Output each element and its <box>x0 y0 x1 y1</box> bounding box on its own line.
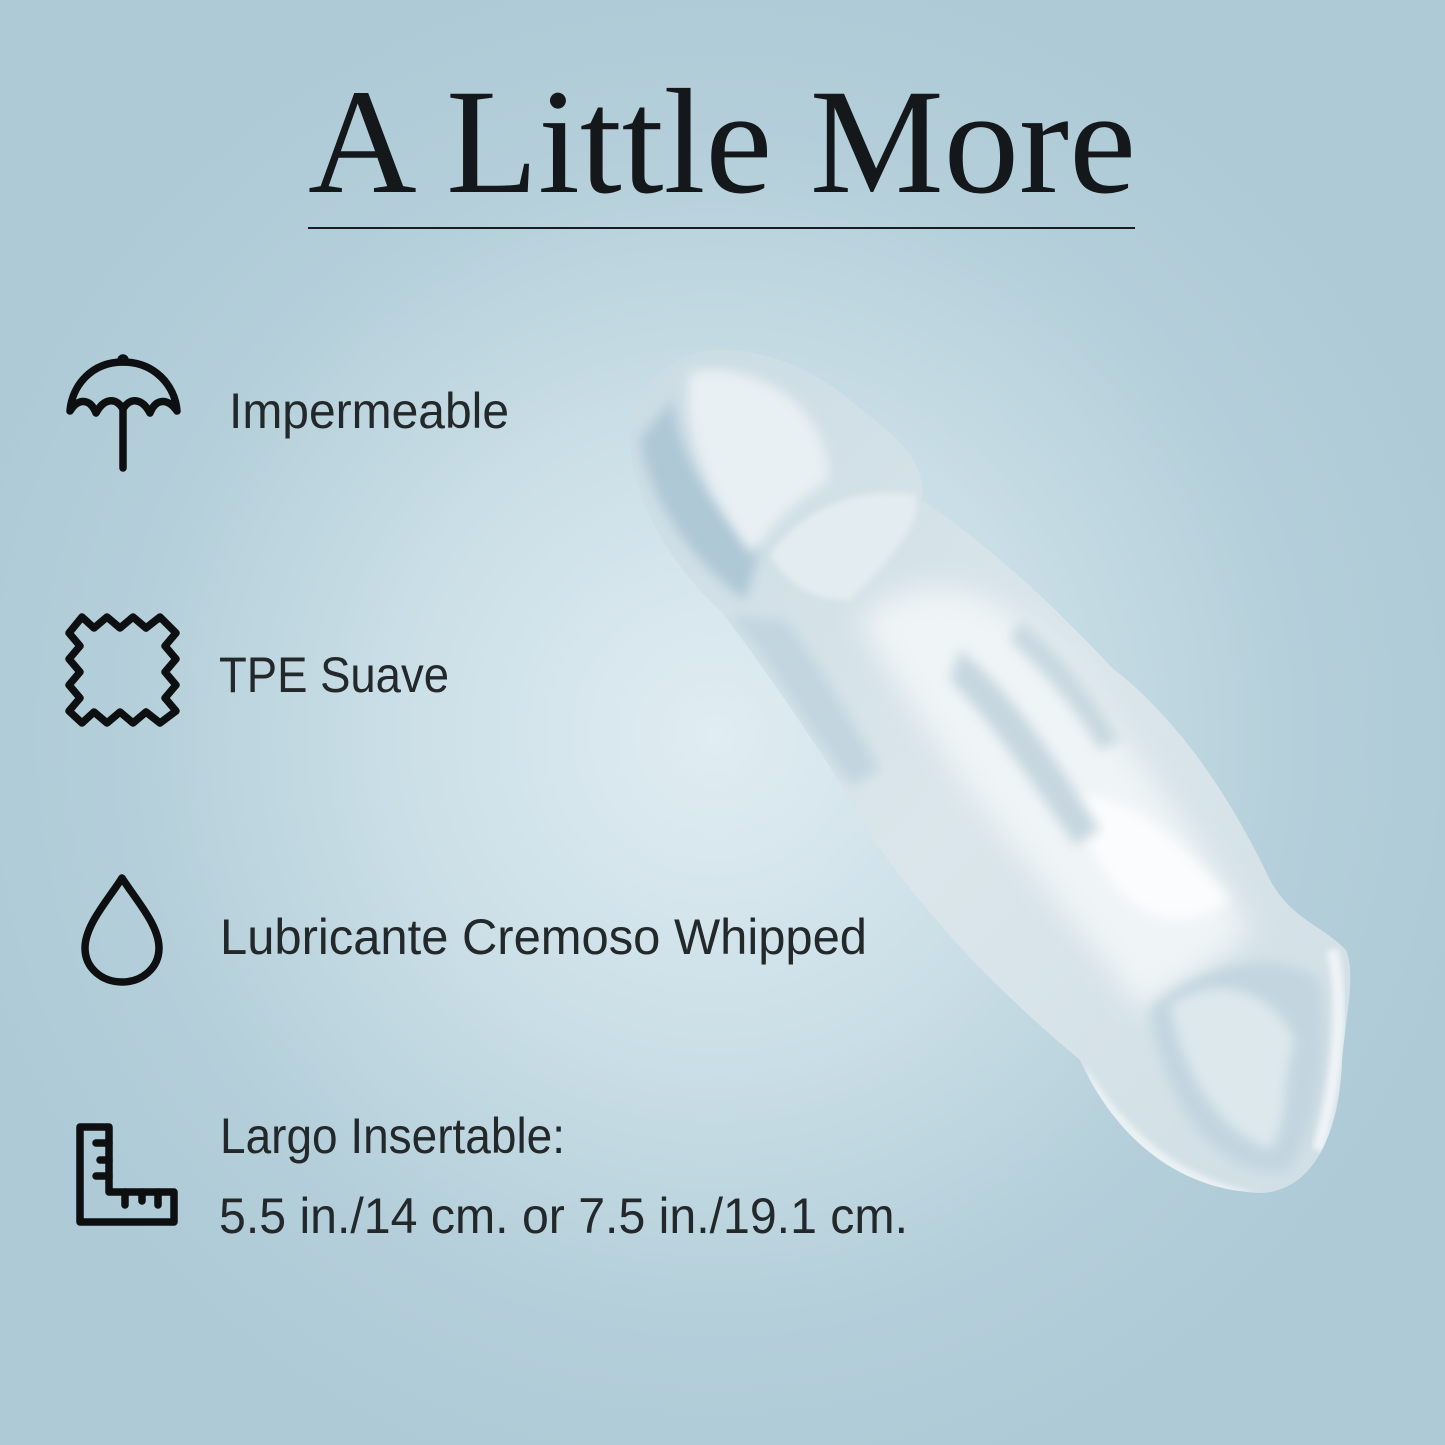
product photo: translucent clear product <box>638 354 1350 1193</box>
label: TPE Suave: TPE Suave <box>219 647 449 703</box>
icon: water drop <box>85 878 159 982</box>
label: insertable length: Largo Insertable: <box>220 1108 565 1164</box>
label: insertable length: 5.5 in./14 cm. or 7.5 in./19.1 cm. <box>219 1188 908 1244</box>
title: A Little More <box>308 59 1136 225</box>
label: Lubricante Cremoso Whipped: Lubricante Cremoso Whipped <box>220 909 867 965</box>
icon: ruler <box>80 1127 174 1222</box>
label: Impermeable: Impermeable <box>229 383 509 439</box>
label: insertable length <box>219 1108 908 1244</box>
icon: fabric swatch <box>69 617 176 723</box>
icon: umbrella <box>70 358 177 468</box>
